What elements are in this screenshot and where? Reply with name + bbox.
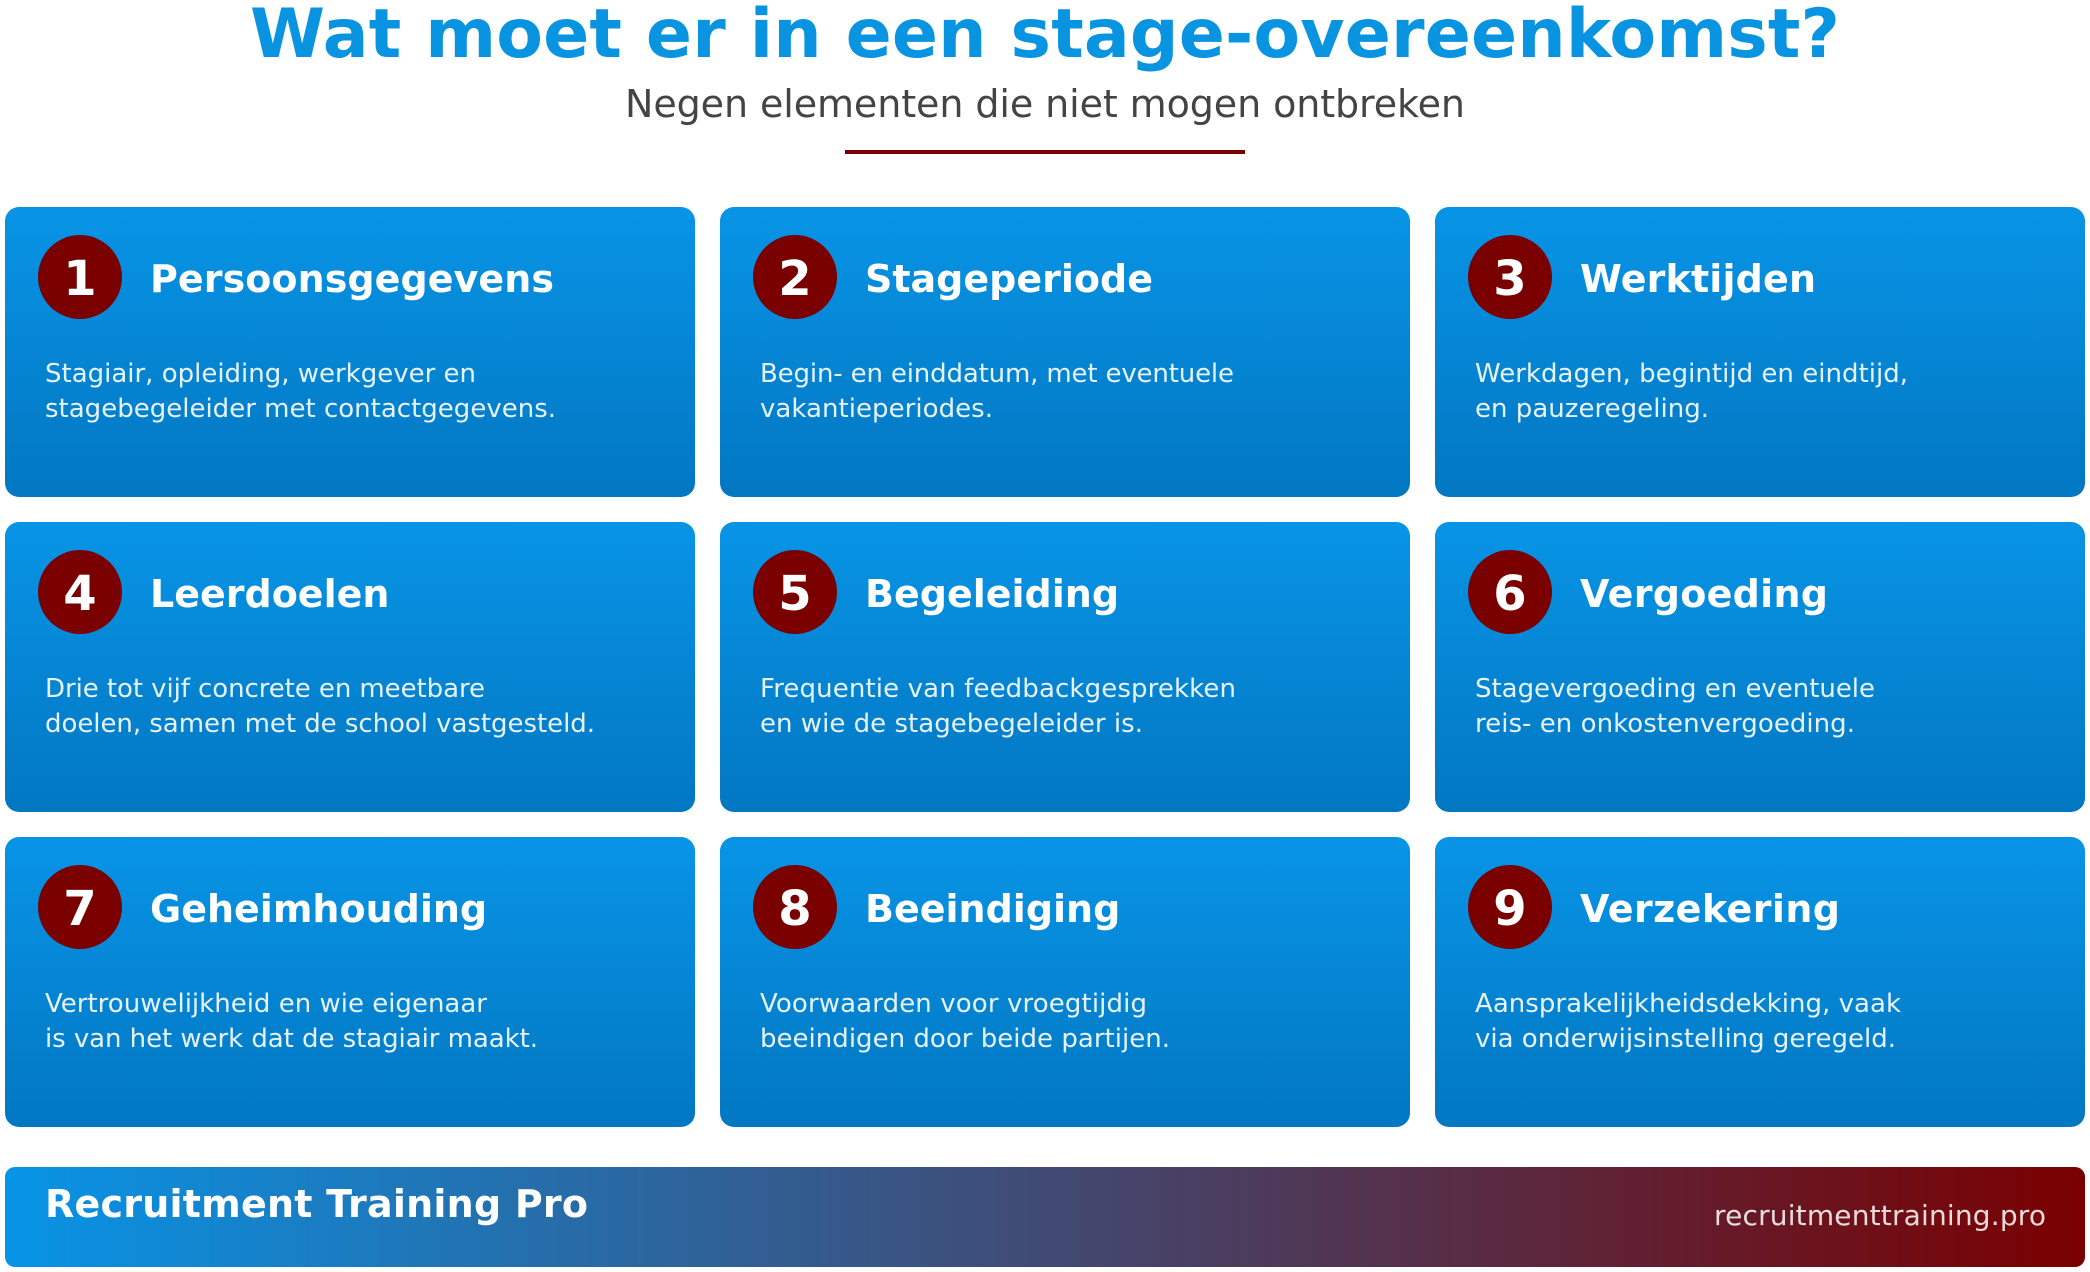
panel 5: Begeleiding: 5 — [778, 566, 812, 622]
panel 1: Persoonsgegevens: Persoonsgegevens — [150, 257, 554, 301]
panel 9: Verzekering: 9 — [1493, 881, 1527, 937]
panel 1: Persoonsgegevens: Stagiair, opleiding, werkgever en — [45, 359, 476, 389]
panel 5: Begeleiding: Frequentie van feedbackgesprekken — [760, 674, 1236, 704]
footer bar: recruitmenttraining.pro — [1714, 1199, 2046, 1232]
panel 3: Werktijden: en pauzeregeling. — [1475, 394, 1709, 424]
panel 7: Geheimhouding — [5, 837, 695, 1127]
panel 3: Werktijden — [1435, 207, 2085, 497]
panel 7: Geheimhouding: is van het werk dat de stagiair maakt. — [45, 1024, 538, 1054]
panel 8: Beeindiging — [720, 837, 1410, 1127]
panel 2: Stageperiode: Begin- en einddatum, met eventuele — [760, 359, 1234, 389]
panel 4: Leerdoelen: Drie tot vijf concrete en meetbare — [45, 674, 485, 704]
panel 1: Persoonsgegevens: stagebegeleider met contactgegevens. — [45, 394, 556, 424]
panel 8: Beeindiging: 8 — [778, 881, 812, 937]
panel 3: Werktijden: Werktijden — [1580, 257, 1816, 301]
panel 7: Geheimhouding: 7 — [63, 881, 97, 937]
panel 3: Werktijden: Werkdagen, begintijd en eindtijd, — [1475, 359, 1908, 389]
subtitle: Negen elementen die niet mogen ontbreken — [625, 82, 1465, 126]
panel 4: Leerdoelen: 4 — [63, 566, 97, 622]
panel 8: Beeindiging: Beeindiging — [865, 887, 1120, 931]
panel 4: Leerdoelen — [5, 522, 695, 812]
panel 8: Beeindiging: Voorwaarden voor vroegtijdig — [760, 989, 1147, 1019]
panel 6: Vergoeding — [1435, 522, 2085, 812]
divider line — [845, 150, 1245, 154]
panel 4: Leerdoelen: Leerdoelen — [150, 572, 389, 616]
panel 5: Begeleiding: en wie de stagebegeleider is. — [760, 709, 1143, 739]
panel 9: Verzekering: via onderwijsinstelling geregeld. — [1475, 1024, 1896, 1054]
panel 6: Vergoeding: Vergoeding — [1580, 572, 1828, 616]
panel 2: Stageperiode — [720, 207, 1410, 497]
panel 6: Vergoeding: Stagevergoeding en eventuele — [1475, 674, 1875, 704]
panel 4: Leerdoelen: doelen, samen met de school vastgesteld. — [45, 709, 595, 739]
panel 2: Stageperiode: 2 — [778, 251, 812, 307]
panel 9: Verzekering: Aansprakelijkheidsdekking, vaak — [1475, 989, 1901, 1019]
panel 6: Vergoeding: reis- en onkostenvergoeding. — [1475, 709, 1855, 739]
panel 9: Verzekering — [1435, 837, 2085, 1127]
footer bar: Recruitment Training Pro — [45, 1182, 588, 1226]
panel 9: Verzekering: Verzekering — [1580, 887, 1840, 931]
panel 2: Stageperiode: Stageperiode — [865, 257, 1153, 301]
panel 7: Geheimhouding: Vertrouwelijkheid en wie eigenaar — [45, 989, 487, 1019]
panel 6: Vergoeding: 6 — [1493, 566, 1527, 622]
panel 5: Begeleiding — [720, 522, 1410, 812]
panel 1: Persoonsgegevens — [5, 207, 695, 497]
panel 7: Geheimhouding: Geheimhouding — [150, 887, 487, 931]
panel 2: Stageperiode: vakantieperiodes. — [760, 394, 993, 424]
panel 3: Werktijden: 3 — [1493, 251, 1527, 307]
footer bar — [5, 1167, 2085, 1267]
panel 8: Beeindiging: beeindigen door beide partijen. — [760, 1024, 1170, 1054]
panel 5: Begeleiding: Begeleiding — [865, 572, 1119, 616]
panel 1: Persoonsgegevens: 1 — [63, 251, 97, 307]
